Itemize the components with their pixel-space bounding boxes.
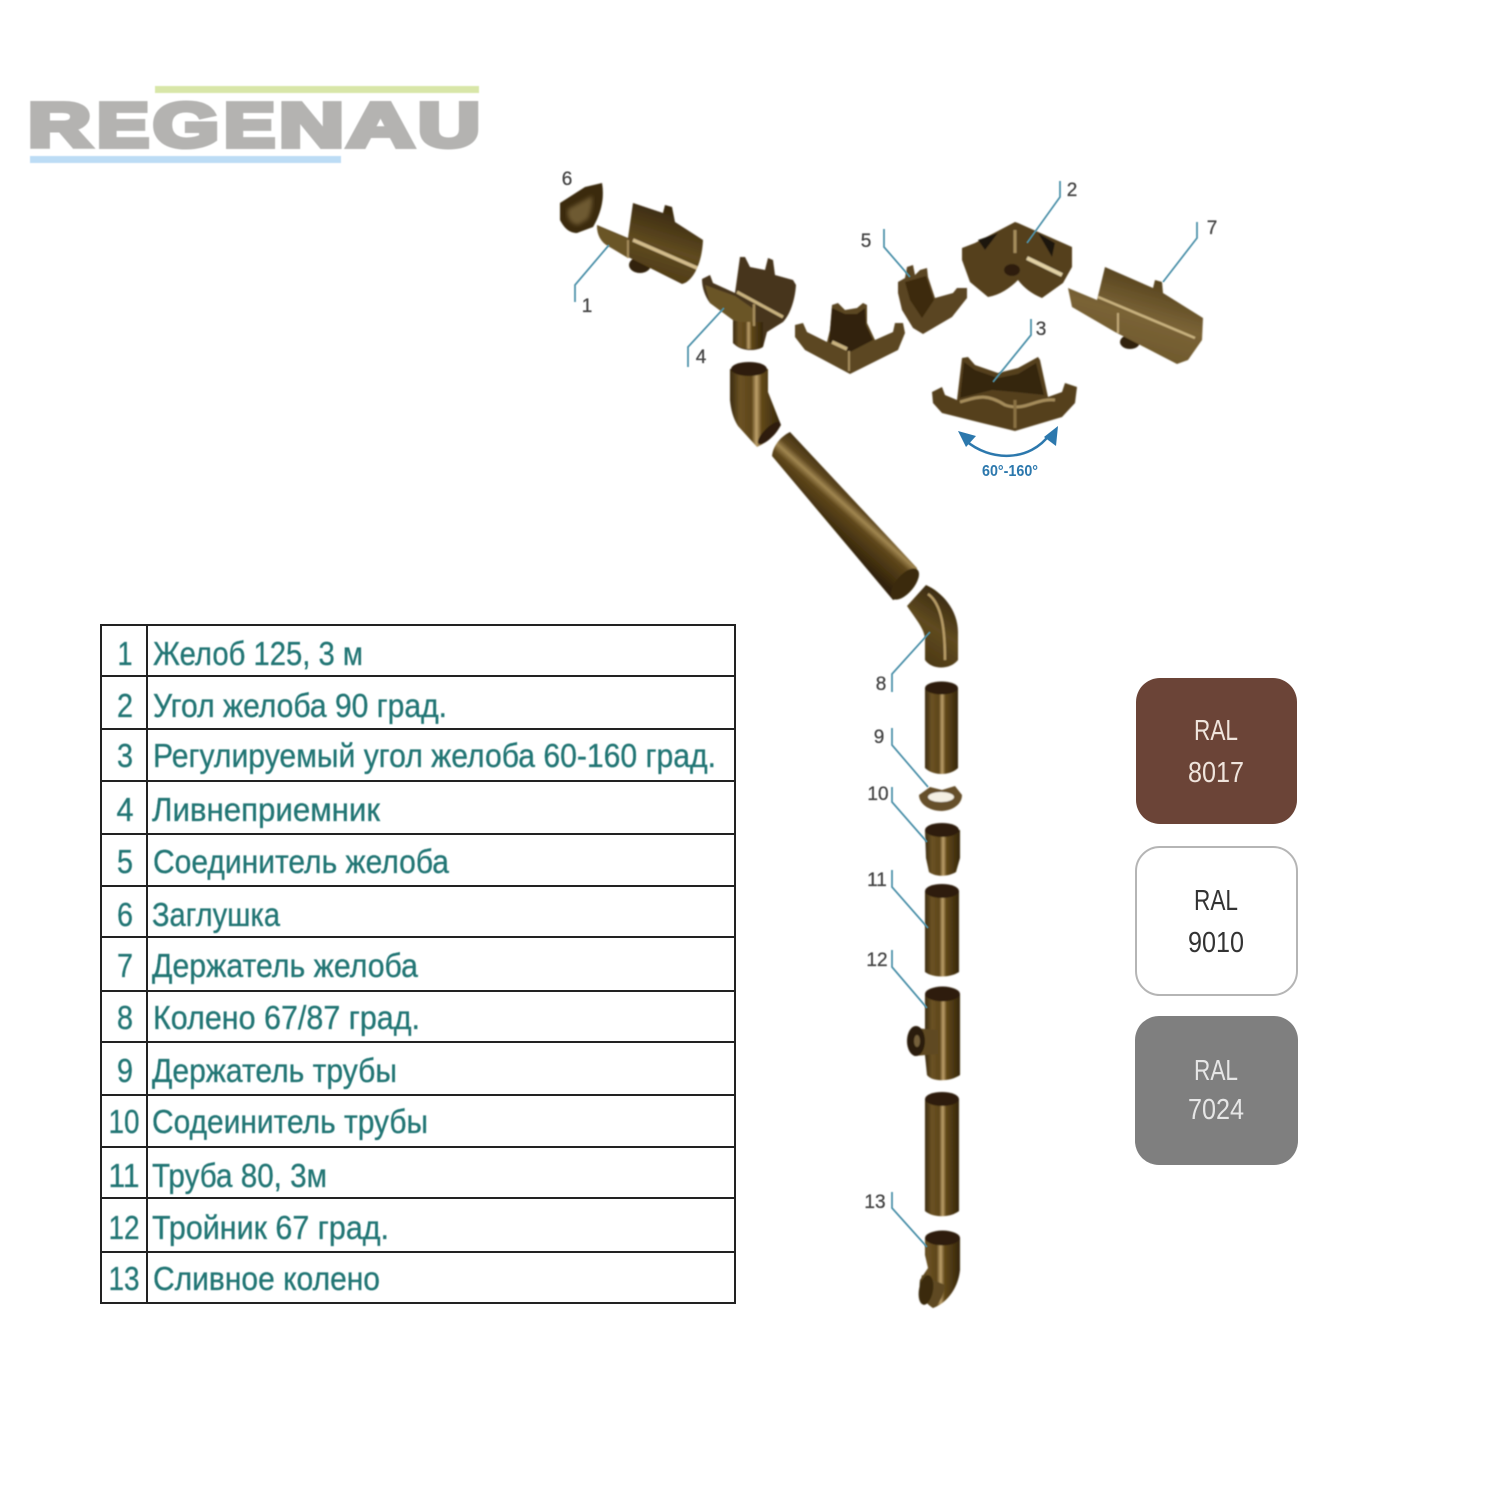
colour swatch: RAL 8017: 8017 [1188, 757, 1244, 789]
table row labels: Тройник 67 град. [152, 1209, 389, 1246]
adjustment arrow: 60°-160°: 60°-160° [982, 463, 1038, 480]
colour swatch: RAL 8017: RAL [1194, 715, 1238, 747]
table row numbers: 3 [117, 737, 133, 774]
colour swatch: RAL 7024 [1135, 1016, 1298, 1165]
part 7: gutter bracket [1068, 267, 1203, 364]
colour swatch: RAL 7024: RAL [1194, 1055, 1238, 1087]
part number labels: 4 [696, 347, 707, 368]
table row numbers: 11 [108, 1157, 140, 1194]
part 3: adjustable corner [932, 357, 1077, 431]
part number labels: 7 [1207, 218, 1217, 239]
leader lines [575, 181, 1197, 1247]
table row labels: Сливное колено [153, 1260, 380, 1297]
table row numbers: 7 [117, 947, 133, 984]
table row labels [152, 635, 716, 1297]
part 6: end cap [560, 183, 603, 233]
table grid [101, 625, 735, 1303]
table row numbers: 5 [117, 843, 133, 880]
logo: REGENAU: E [97, 92, 149, 160]
table row numbers: 4 [116, 791, 134, 828]
logo: REGENAU [28, 86, 480, 163]
colour swatch: RAL 9010: RAL [1194, 885, 1238, 917]
elbow: outlet connector [730, 362, 783, 447]
downpipe lower section [925, 1092, 959, 1216]
table row labels: Ливнеприемник [152, 791, 381, 828]
table row numbers: 12 [108, 1209, 140, 1246]
part number labels: 11 [867, 870, 887, 891]
part 4: gutter outlet [702, 257, 796, 350]
part number labels: 9 [874, 727, 884, 748]
logo: REGENAU: E [224, 92, 275, 160]
table row numbers: 10 [108, 1103, 140, 1140]
table row labels: Регулируемый угол желоба 60-160 град. [153, 737, 716, 774]
table row labels: Угол желоба 90 град. [153, 687, 447, 724]
part number labels: 8 [876, 674, 886, 695]
part 10: pipe connector [925, 823, 960, 876]
table row numbers: 2 [117, 687, 133, 724]
part number labels: 6 [562, 169, 572, 190]
logo: REGENAU: G [153, 92, 219, 160]
table row numbers: 6 [117, 896, 133, 933]
colour swatch: RAL 7024: 7024 [1188, 1094, 1244, 1126]
downpipe section [925, 682, 958, 774]
logo: REGENAU: N [279, 92, 344, 160]
table row labels: Держатель трубы [152, 1052, 397, 1089]
part 13: outlet elbow [917, 1230, 960, 1308]
logo: REGENAU: R [28, 92, 91, 160]
part number labels: 5 [861, 231, 871, 252]
table row numbers: 1 [118, 635, 132, 672]
part number labels: 12 [866, 950, 888, 971]
table row labels: Заглушка [152, 896, 281, 933]
part 8: elbow [907, 585, 958, 668]
table row numbers: 13 [108, 1260, 140, 1297]
parts diagram: gutter system [560, 169, 1217, 1308]
part 12: tee [907, 986, 960, 1080]
adjustment arrow: 60°-160° [958, 426, 1058, 480]
part 1: gutter [597, 203, 703, 284]
table row labels: Колено 67/87 град. [153, 999, 420, 1036]
part number labels: 2 [1067, 180, 1077, 201]
logo: REGENAU: U [418, 92, 480, 160]
part number labels: 3 [1036, 319, 1046, 340]
table row numbers: 8 [117, 999, 133, 1036]
pipe: diagonal downpipe [772, 432, 924, 604]
table row labels: Содеинитель трубы [152, 1103, 428, 1140]
part 2: 90 degree corner [962, 222, 1072, 298]
table row numbers [108, 635, 140, 1297]
part number labels [562, 169, 1217, 1213]
table row numbers: 9 [117, 1052, 133, 1089]
table row labels: Держатель желоба [152, 947, 419, 984]
part number labels: 1 [582, 296, 592, 317]
colour swatch: RAL 8017 [1136, 678, 1297, 824]
table row labels: Соединитель желоба [153, 843, 450, 880]
table row labels: Труба 80, 3м [152, 1157, 327, 1194]
colour swatch: RAL 9010 [1136, 847, 1297, 995]
logo: REGENAU: A [347, 92, 414, 160]
part number labels: 13 [864, 1192, 886, 1213]
part 9: pipe bracket ring [919, 786, 962, 811]
part 5: gutter connector [898, 265, 967, 334]
colour swatch: RAL 9010: 9010 [1188, 927, 1244, 959]
external corner piece [795, 303, 905, 374]
part number labels: 10 [867, 784, 889, 805]
part 11: pipe [925, 884, 959, 976]
table row labels: Желоб 125, 3 м [153, 635, 363, 672]
parts table [101, 625, 735, 1303]
